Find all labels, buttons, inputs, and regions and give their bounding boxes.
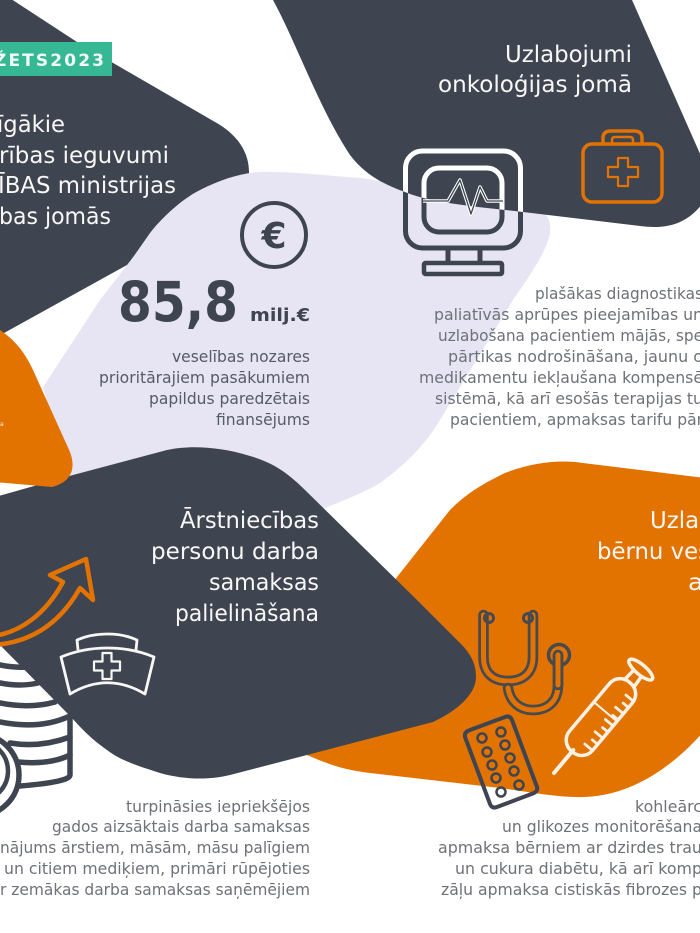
heading: oncology <box>438 42 632 98</box>
panel: lavender funding shape <box>43 172 550 510</box>
text: children's health description: zāļu apmaksa cistiskās fibrozes p <box>441 880 700 899</box>
text: funding description: veselības nozares <box>172 347 310 366</box>
icon: heart monitor <box>406 151 520 274</box>
heading: medical staff pay: palielināšana <box>175 601 319 627</box>
badge: budget 2023 <box>0 42 112 76</box>
heading: medical staff pay: personu darba <box>151 539 319 565</box>
text: pay description: gados aizsāktais darba samaksas <box>52 817 310 836</box>
heading: medical staff pay <box>151 507 319 627</box>
icon: first aid kit <box>583 131 662 202</box>
text: pay description: nājums ārstiem, māsām, māsu palīgiem <box>0 838 310 857</box>
icon: coin stack <box>0 665 70 816</box>
text: children's health description: apmaksa bērniem ar dzirdes trau <box>438 838 700 857</box>
text: funding description <box>99 347 310 429</box>
icon: stethoscope <box>484 614 570 710</box>
text: funding description: prioritārajiem pasākumiem <box>99 368 310 387</box>
text: oncology description: pārtikas nodrošināšana, jaunu o <box>448 347 700 366</box>
heading: main title <box>0 112 176 230</box>
text: pay description <box>0 797 310 899</box>
stat: 85,8 milj.€: 85,8 <box>118 270 238 334</box>
text: oncology description <box>419 284 700 429</box>
icon: pill blister <box>465 716 537 808</box>
icon: nurse cap <box>61 634 154 694</box>
panel: top-left dark shape <box>0 0 249 338</box>
panel: left orange shape: a <box>0 421 4 428</box>
text: children's health description <box>438 797 700 899</box>
text: pay description: un citiem mediķiem, primāri rūpējoties <box>4 859 310 878</box>
heading: main title: rības ieguvumi <box>0 143 169 169</box>
text: pay description: r zemākas darba samaksas saņēmējiem <box>0 880 310 899</box>
icon: syringe <box>543 656 655 783</box>
heading: oncology: Uzlabojumi <box>505 42 632 68</box>
text: oncology description: medikamentu iekļaušana kompensē <box>419 368 700 387</box>
heading: medical staff pay: samaksas <box>209 570 319 596</box>
text: funding description: papildus paredzētais <box>149 389 310 408</box>
icon: rising arrow <box>0 559 93 645</box>
panel: top-right dark shape <box>273 0 700 227</box>
panel: middle dark shape <box>0 447 476 779</box>
stat: 85,8 milj.€: milj.€ <box>250 305 310 326</box>
heading: medical staff pay: Ārstniecības <box>180 507 319 534</box>
text: funding description: finansējums <box>216 410 310 429</box>
text: pay description: turpināsies iepriekšējos <box>126 797 310 816</box>
icon: euro coin: € <box>260 216 287 257</box>
icon: euro coin <box>242 203 306 267</box>
heading: main title: ĪBAS ministrijas <box>0 172 176 199</box>
heading: main title: bas jomās <box>0 204 111 230</box>
heading: oncology: onkoloģijas jomā <box>438 72 632 98</box>
panel: left orange shape <box>0 330 73 487</box>
heading: children's health <box>597 508 700 596</box>
text: children's health description: un cukura diabētu, kā arī komp <box>455 859 700 878</box>
panel: right orange shape <box>300 461 700 797</box>
